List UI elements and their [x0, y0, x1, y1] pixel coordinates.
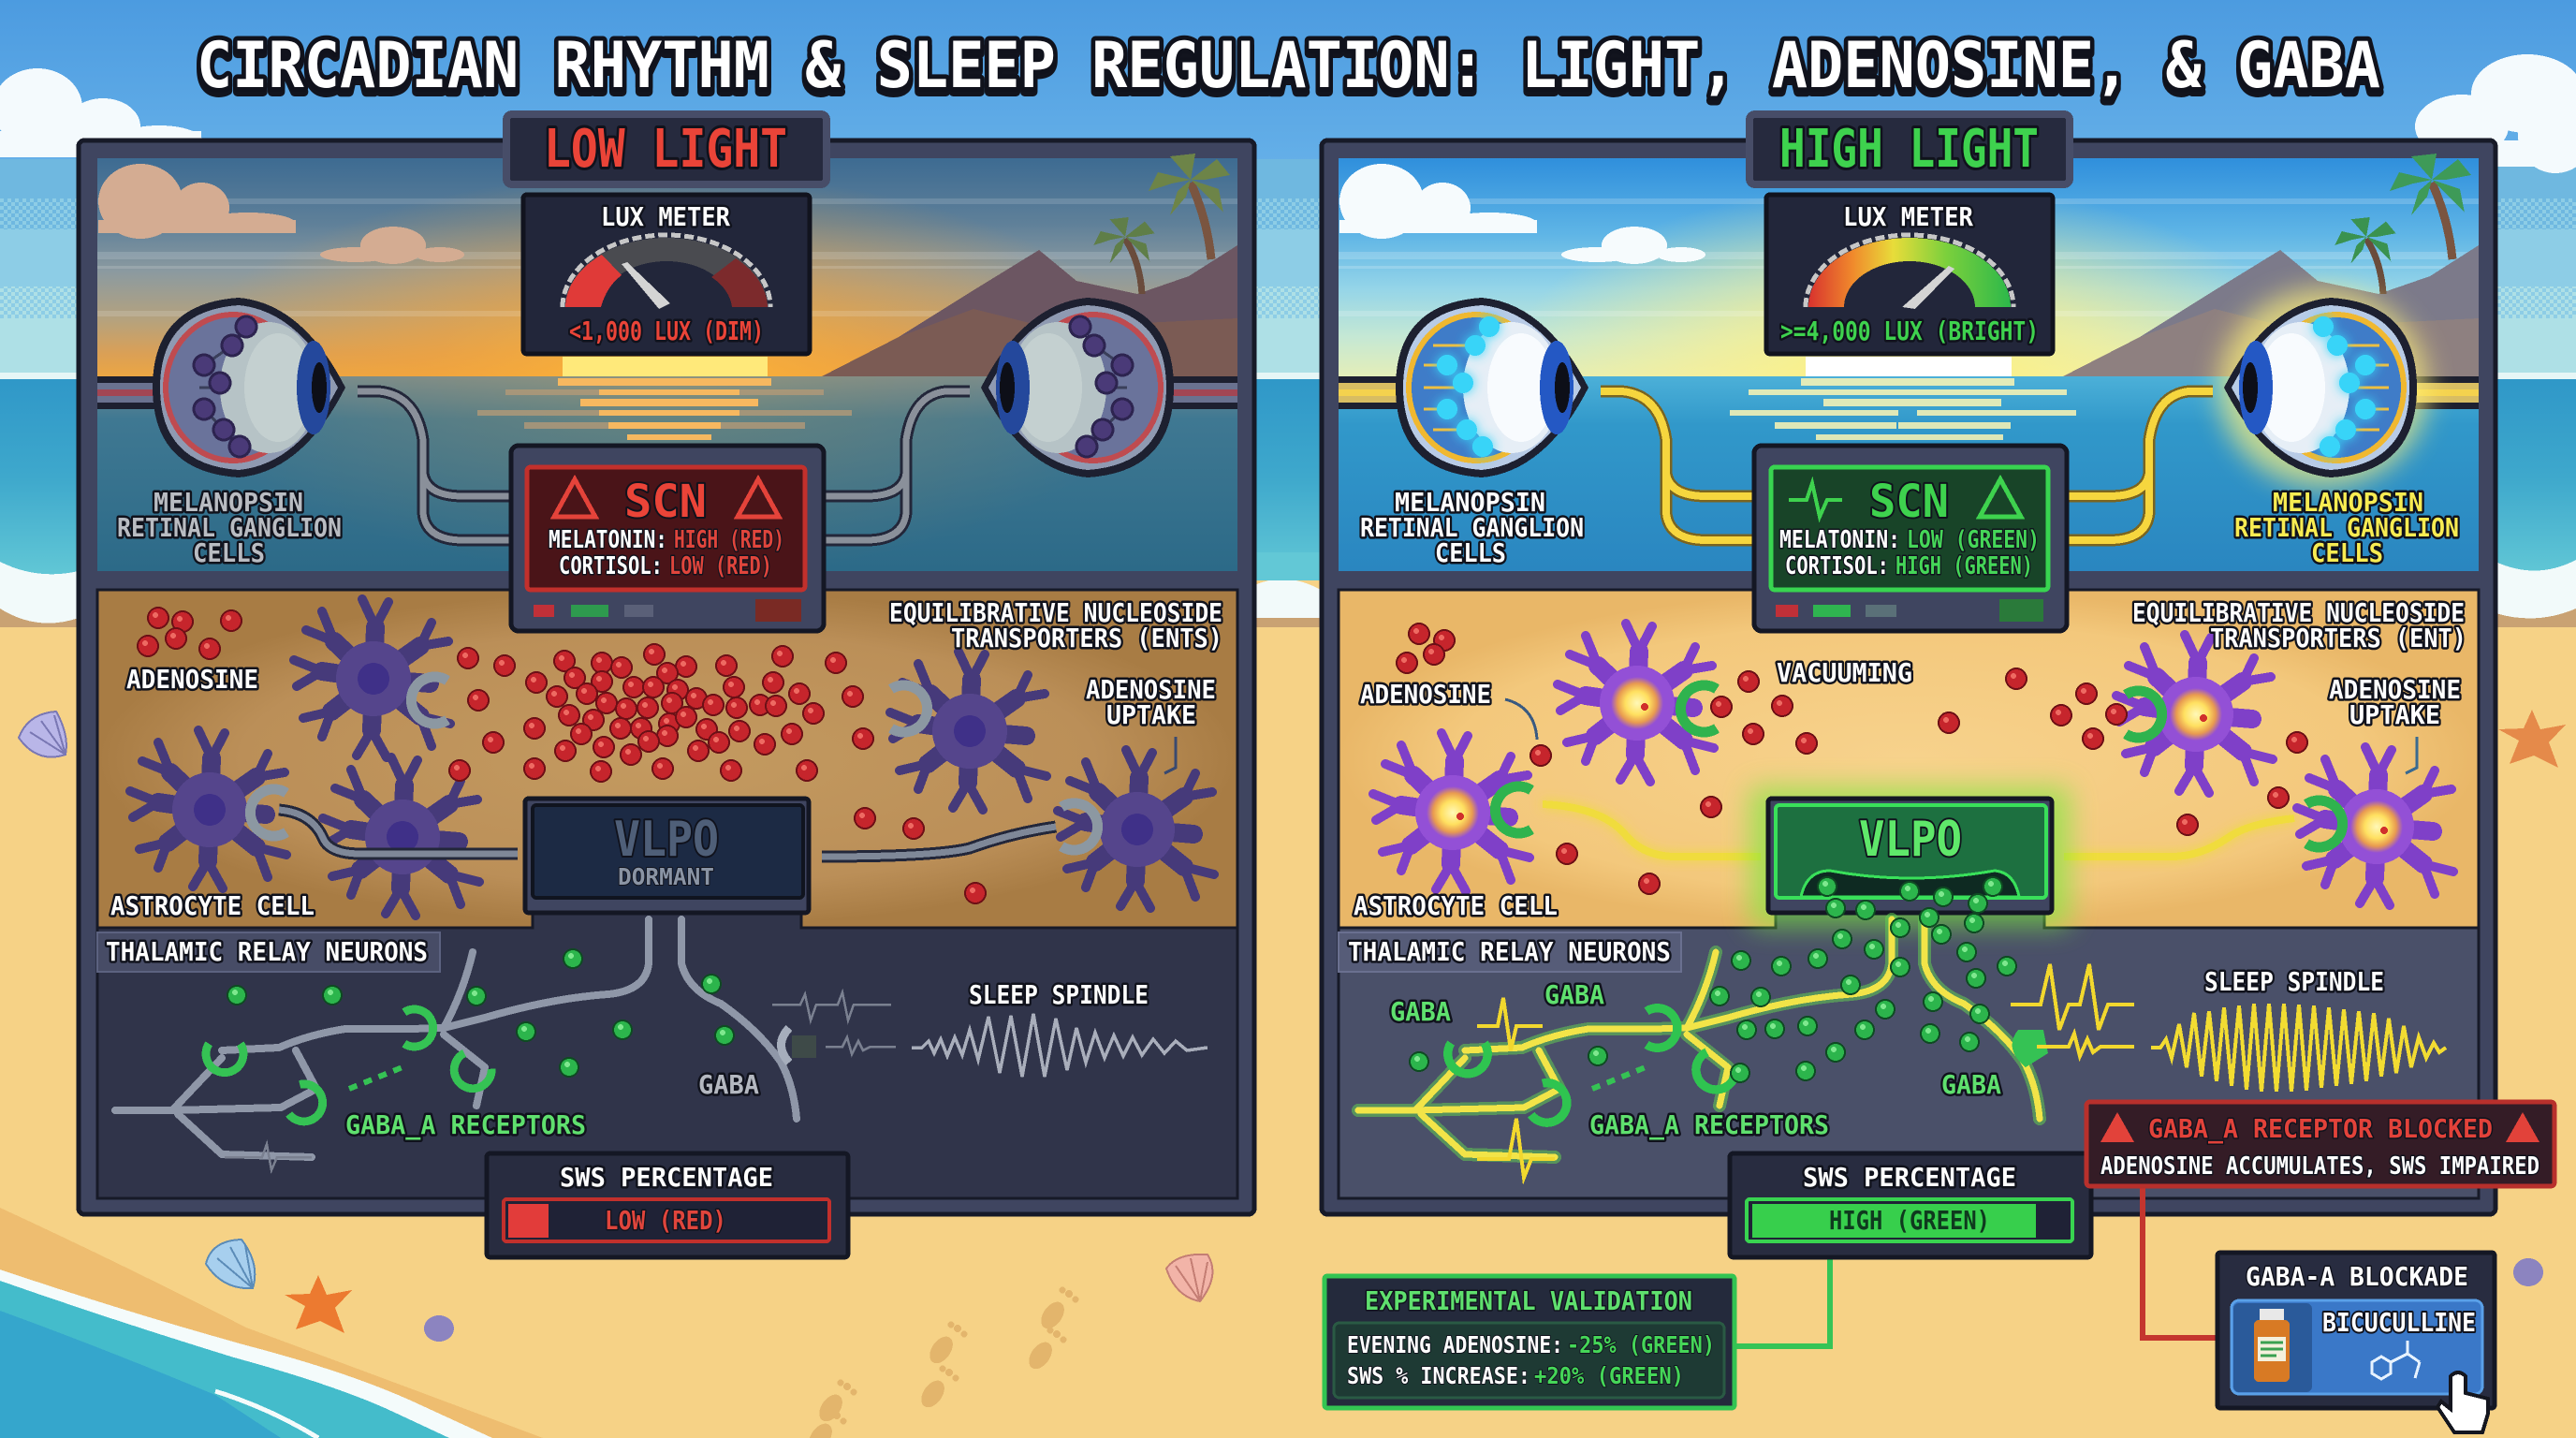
title: CIRCADIAN RHYTHM & SLEEP REGULATION: LIGHT, ADENOSINE, & GABA — [197, 29, 2380, 103]
SCN module: low light: SCN — [624, 476, 707, 528]
SWS gauge: low light — [487, 1153, 848, 1257]
lux meter: low light: LUX METER — [601, 201, 730, 232]
cloud: top left — [0, 68, 202, 157]
label: adenosine uptake, low light — [1086, 674, 1216, 773]
cloud: top right — [2359, 54, 2576, 173]
panel frame — [1322, 140, 2496, 1214]
nerve cables: high light — [1601, 391, 2213, 540]
SCN module: low light: HIGH (RED) — [674, 526, 784, 554]
panel: GABA-A blockade: BICUCULLINE — [2322, 1307, 2476, 1338]
EEG traces: high light — [1477, 964, 2134, 1178]
label: GABA, particles centre: GABA — [1544, 979, 1604, 1010]
panel: experimental validation: EXPERIMENTAL VALIDATION — [1365, 1285, 1692, 1316]
VLPO wires: high light — [1543, 804, 2294, 857]
label: ENT, high light: TRANSPORTERS (ENT) — [2210, 623, 2466, 653]
label: melanopsin RGC, left, high light: MELANOPSIN — [1395, 487, 1545, 518]
SCN module: high light: CORTISOL: — [1785, 552, 1889, 580]
footprints — [804, 1286, 1078, 1438]
lux meter: high light: LUX METER — [1843, 201, 1973, 232]
thalamic section — [97, 914, 1237, 1198]
gauge — [563, 235, 770, 309]
VLPO wires: low light — [279, 810, 1056, 857]
lux meter: low light: <1,000 LUX (DIM) — [569, 315, 764, 346]
thalamic neurons: high light — [1358, 919, 2048, 1157]
EEG traces: low light — [225, 992, 896, 1170]
sleep spindle: low light — [912, 979, 1208, 1077]
sky and sea scene — [1339, 154, 2479, 571]
SCN module: low light: MELATONIN: — [549, 526, 667, 554]
panel: GABA-A blockade: GABA-A BLOCKADE — [2246, 1261, 2468, 1292]
VLPO: dormant: VLPO — [614, 812, 719, 868]
lux meter: low light — [523, 195, 810, 354]
GABA particles: high light — [1409, 876, 2017, 1083]
SWS gauge: high light — [1730, 1153, 2091, 1257]
eye: right, high light — [2218, 288, 2479, 487]
label: adenosine, high light: ADENOSINE — [1360, 679, 1491, 710]
label: adenosine, high light — [1360, 679, 1537, 740]
alert: GABA_A receptor blocked — [2086, 1102, 2554, 1186]
label: vacuuming: VACUUMING — [1777, 657, 1912, 688]
GABA_A receptors — [1448, 1008, 1738, 1128]
shell: lavender — [19, 712, 66, 757]
panel: high light — [1322, 140, 2496, 1214]
sleep spindle: high light: SLEEP SPINDLE — [2204, 966, 2384, 997]
label: melanopsin RGC, low light: MELANOPSIN — [154, 487, 303, 518]
label: ENTs, low light: EQUILIBRATIVE NUCLEOSIDE — [889, 597, 1222, 628]
label: adenosine uptake, high light: ADENOSINE — [2329, 674, 2461, 705]
label: GABA_A receptors, low light: GABA_A RECEPTORS — [345, 1109, 586, 1140]
nerve cables: low light — [358, 391, 970, 540]
SCN module: low light — [511, 446, 824, 631]
label tab: thalamic relay neurons, high light: THALAMIC RELAY NEURONS — [1348, 936, 1671, 967]
GABA_A receptors — [206, 1009, 494, 1127]
VLPO: active — [1749, 786, 2071, 927]
SWS gauge: high light: HIGH (GREEN) — [1829, 1205, 1990, 1236]
shell: blue — [206, 1240, 255, 1288]
VLPO: dormant: DORMANT — [618, 863, 714, 890]
shell: pink — [1166, 1255, 1212, 1301]
label: GABA_A receptors, high light: GABA_A RECEPTORS — [1589, 1109, 1829, 1140]
label: ENT, high light — [2132, 597, 2466, 653]
adenosine particles: high light — [1396, 623, 2308, 895]
adenosine particles: low light — [137, 607, 987, 904]
label: astrocyte cell, low light: ASTROCYTE CELL — [110, 890, 315, 921]
SCN module: high light — [1754, 446, 2067, 631]
tab: high light: HIGH LIGHT — [1779, 119, 2039, 180]
alert: GABA_A receptor blocked: GABA_A RECEPTOR BLOCKED — [2148, 1113, 2493, 1144]
starfish: bottom — [285, 1275, 352, 1333]
panel: low light — [79, 140, 1254, 1214]
sky and sea scene — [97, 154, 1237, 576]
label: ENTs, low light: TRANSPORTERS (ENTS) — [951, 623, 1222, 653]
sand section — [1339, 590, 2479, 928]
label: melanopsin RGC, left, high light: RETINAL GANGLION — [1360, 512, 1584, 543]
SCN module: high light: SCN — [1869, 476, 1949, 528]
label: GABA, particles left: GABA — [1390, 996, 1451, 1027]
icon: hand cursor — [2437, 1372, 2488, 1432]
label: GABA, right: GABA — [1941, 1069, 2001, 1100]
panel: experimental validation: SWS % INCREASE: — [1347, 1362, 1530, 1389]
VLPO: dormant — [525, 799, 809, 913]
label: adenosine uptake, low light: UPTAKE — [1106, 699, 1196, 730]
thalamic section — [1339, 914, 2479, 1198]
pebble — [424, 1315, 454, 1342]
gauge — [1806, 235, 2013, 309]
sleep spindle: low light: SLEEP SPINDLE — [969, 979, 1149, 1010]
label: melanopsin RGC, low light — [117, 487, 342, 568]
label: melanopsin RGC, low light: CELLS — [193, 537, 265, 568]
thalamic neurons: low light — [115, 919, 816, 1157]
label: adenosine, low light: ADENOSINE — [126, 664, 258, 695]
connector: SWS to experimental validation — [1735, 1258, 1830, 1346]
label: ENT, high light: EQUILIBRATIVE NUCLEOSIDE — [2132, 597, 2465, 628]
label: melanopsin RGC, left, high light — [1360, 487, 1584, 568]
lux meter: high light: >=4,000 LUX (BRIGHT) — [1780, 315, 2039, 346]
warning icons — [2100, 1112, 2539, 1142]
label: melanopsin RGC, left, high light: CELLS — [1435, 537, 1506, 568]
warning icon — [1980, 479, 2021, 517]
SCN module: high light: LOW (GREEN) — [1907, 526, 2040, 554]
sand section — [97, 590, 1237, 928]
icon: molecule — [2372, 1341, 2420, 1379]
status lights — [1776, 599, 2043, 622]
lux meter: high light — [1766, 195, 2053, 354]
panel frame — [79, 140, 1254, 1214]
label: ENTs, low light — [889, 597, 1222, 653]
icon: bottle — [2254, 1309, 2290, 1382]
panel: experimental validation: +20% (GREEN) — [1534, 1362, 1684, 1389]
starfish: right — [2498, 710, 2566, 768]
pebble: right — [2513, 1258, 2543, 1286]
astrocytes: low light — [130, 599, 1214, 916]
eye: right, low light — [981, 298, 1237, 477]
GABA particles: low light — [227, 948, 735, 1078]
panel: experimental validation: -25% (GREEN) — [1567, 1331, 1715, 1358]
panel: experimental validation — [1325, 1276, 1734, 1408]
panel: GABA-A blockade — [2217, 1253, 2495, 1408]
eye: left, high light — [1339, 298, 1588, 477]
panel: experimental validation: EVENING ADENOSINE: — [1347, 1331, 1563, 1358]
label: melanopsin RGC, right, high light — [2234, 487, 2459, 568]
label: melanopsin RGC, low light: RETINAL GANGLION — [117, 512, 342, 543]
SWS gauge: low light: LOW (RED) — [605, 1205, 726, 1236]
label tab: thalamic relay neurons, low light: THALAMIC RELAY NEURONS — [106, 936, 428, 967]
SCN module: high light: HIGH (GREEN) — [1895, 552, 2033, 580]
label: adenosine uptake, high light — [2329, 674, 2461, 773]
label: melanopsin RGC, right, high light: CELLS — [2311, 537, 2383, 568]
label: astrocyte cell, high light: ASTROCYTE CELL — [1354, 890, 1558, 921]
pulse icon — [1789, 483, 1842, 517]
label: adenosine uptake, high light: UPTAKE — [2349, 699, 2440, 730]
SCN module: high light: MELATONIN: — [1779, 526, 1900, 554]
SCN module: low light: CORTISOL: — [559, 552, 663, 580]
status lights — [534, 599, 801, 622]
eye: left, low light — [97, 298, 345, 477]
connector: blocked alert to blockade — [2143, 1188, 2217, 1338]
label: melanopsin RGC, right, high light: MELANOPSIN — [2273, 487, 2423, 518]
SWS gauge: low light: SWS PERCENTAGE — [560, 1162, 773, 1193]
warning icons — [554, 479, 779, 517]
label: GABA, low light: GABA — [698, 1069, 759, 1100]
sleep spindle: high light — [2151, 966, 2446, 1092]
SCN module: low light: LOW (RED) — [669, 552, 772, 580]
astrocytes: high light — [1373, 624, 2453, 905]
label: melanopsin RGC, right, high light: RETINAL GANGLION — [2234, 512, 2459, 543]
SWS gauge: high light: SWS PERCENTAGE — [1803, 1162, 2016, 1193]
label: adenosine uptake, low light: ADENOSINE — [1086, 674, 1216, 705]
tab: low light: LOW LIGHT — [544, 119, 787, 180]
VLPO: active: VLPO — [1859, 812, 1962, 868]
